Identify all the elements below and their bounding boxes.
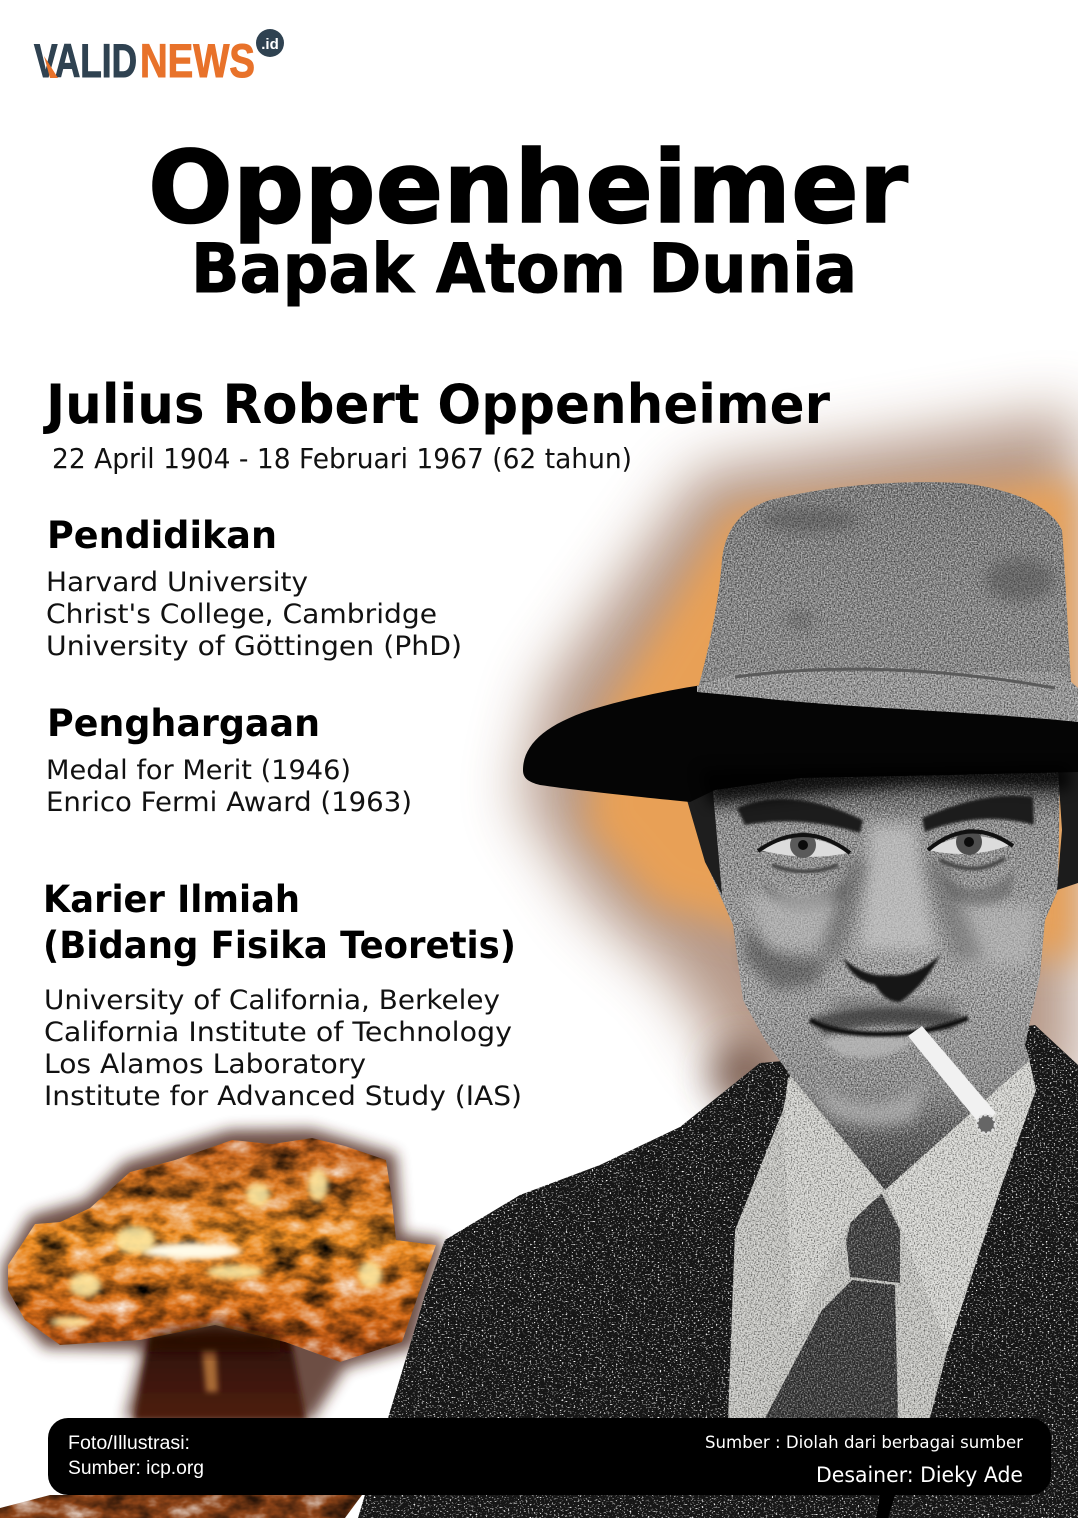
footer bar (48, 1418, 1051, 1495)
career list: University of California, Berkeley (44, 985, 500, 1016)
education list (46, 567, 462, 662)
source credit: Sumber : Diolah dari berbagai sumber (705, 1433, 1023, 1453)
face and neck (695, 770, 1060, 1190)
collar left (783, 1077, 885, 1332)
cap dark underside (150, 1322, 280, 1352)
awards list: Enrico Fermi Award (1963) (46, 787, 412, 818)
cloud cap (8, 1138, 436, 1362)
career list: Los Alamos Laboratory (44, 1049, 366, 1080)
bottom fire strip under footer (0, 1495, 362, 1518)
career list: Institute for Advanced Study (IAS) (44, 1081, 522, 1112)
shirt (728, 1050, 1036, 1418)
face shading (745, 825, 1040, 1126)
career list (44, 985, 522, 1112)
block: scientific career: Karier Ilmiah (43, 878, 300, 921)
subtitle: Bapak Atom Dunia (191, 230, 857, 309)
block: name and dates: Julius Robert Oppenheimer (42, 373, 830, 436)
block: awards: Penghargaan (47, 702, 320, 745)
left eyebrow (737, 799, 863, 833)
photo credit: Foto/Illustrasi: (68, 1433, 190, 1454)
nose underside (843, 955, 940, 1002)
bright patches (50, 1169, 382, 1327)
education list: Christ's College, Cambridge (46, 599, 437, 630)
block: scientific career (43, 878, 522, 1112)
right ear and hair (1057, 770, 1078, 890)
designer credit: Desainer: Dieky Ade (816, 1463, 1023, 1487)
left ear (687, 780, 722, 895)
education list: University of Göttingen (PhD) (46, 631, 462, 662)
mouth line (810, 1018, 968, 1034)
orange glow behind portrait (520, 410, 1078, 1110)
logo wordmark dark: VALID (34, 34, 137, 87)
shadow below brim (700, 765, 1070, 805)
stem (134, 1335, 306, 1420)
awards list: Medal for Merit (1946) (46, 755, 351, 786)
hat brim underside (523, 685, 1078, 802)
cloud halo (2, 1129, 444, 1420)
hat brim top (697, 672, 1078, 722)
logo: ValidNews.id (34, 29, 284, 87)
crown dark patches (760, 508, 1055, 628)
block: scientific career: (Bidang Fisika Teoretis) (43, 924, 516, 967)
right eyebrow (922, 796, 1034, 832)
title: Oppenheimer (148, 129, 909, 246)
title (148, 129, 909, 309)
right eye (928, 829, 1013, 869)
stem highlight (202, 1350, 218, 1392)
block: name and dates (42, 373, 830, 475)
tie below footer (876, 1495, 895, 1518)
block: awards (46, 702, 412, 818)
block: education (46, 514, 462, 662)
hat band (735, 669, 1055, 688)
logo badge: .id (261, 36, 279, 53)
logo V accent (44, 56, 58, 78)
coat (358, 1025, 1078, 1518)
logo wordmark orange: NEWS (140, 34, 255, 87)
awards list (46, 755, 412, 818)
central flash (142, 1243, 242, 1259)
photo credit: Sumber: icp.org (68, 1458, 204, 1479)
portrait of Oppenheimer (358, 482, 1078, 1518)
block: education: Pendidikan (47, 514, 277, 557)
mushroom cloud illustration (2, 1129, 444, 1420)
collar right (885, 1050, 1036, 1348)
tie knot (846, 1194, 900, 1283)
education list: Harvard University (46, 567, 308, 598)
tie blade (765, 1280, 898, 1418)
moustache (810, 1008, 965, 1035)
hat crown (697, 482, 1078, 722)
dates: 22 April 1904 - 18 Februari 1967 (62 tahun) (52, 442, 632, 475)
left eye (758, 832, 850, 872)
logo badge (256, 29, 284, 57)
career list: California Institute of Technology (44, 1017, 512, 1048)
photo credit (68, 1433, 204, 1479)
cigarette (908, 1026, 996, 1133)
